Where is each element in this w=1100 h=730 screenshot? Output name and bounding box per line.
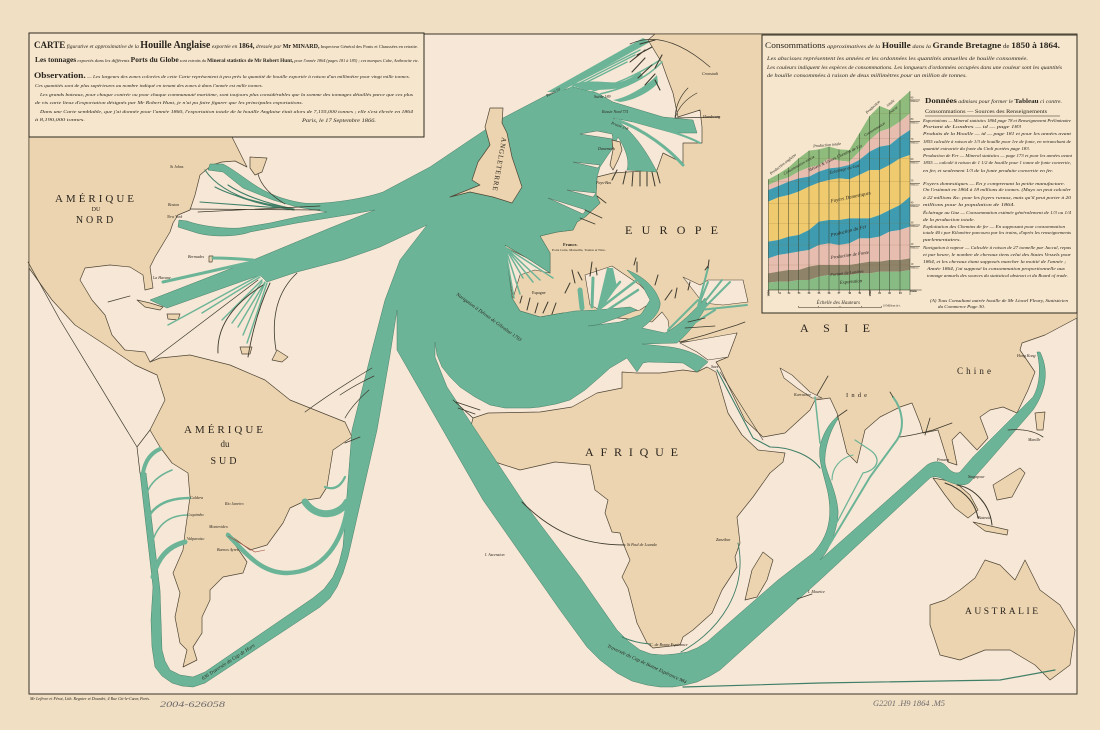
route: Cap de Bonne Espérance (622, 637, 650, 644)
annotation: Russie Nord: Russie Nord 731 (601, 109, 629, 114)
label: France (552, 242, 606, 253)
label: Afrique: AFRIQUE (585, 445, 678, 459)
area: total top green (768, 91, 910, 185)
year labels: 58 (848, 292, 852, 295)
year labels: 55 (818, 292, 821, 295)
chart panel frame (762, 35, 1077, 313)
source line: Les tonnages exportés dans les différents Ports du Globe sont extraits du Mineral statistics de Mr Robert Hunt, pour l'année 1864 (pages 181 à 185) ; ces marques Cube, Anthracite etc. (35, 56, 419, 64)
label: Chine: Chine (957, 366, 991, 376)
pale wedges in the North Sea (548, 131, 622, 214)
stream: Atlantic lines (200, 170, 294, 210)
area labels: Consommation exacte (782, 154, 816, 176)
stream: Prusse north (617, 120, 683, 165)
sources text: Portant de Londres — id — page 183 (922, 124, 1022, 129)
Spain port ticks (520, 262, 597, 314)
continent and country names (55, 137, 1038, 617)
axis values (910, 96, 919, 293)
route: Panama (108, 280, 258, 362)
route: Karachi (815, 397, 820, 443)
sources text: et par heure, le nombre de chevaux tiens celui des States Vessels pour (923, 252, 1071, 258)
scale: 10 Millions de t. (883, 305, 901, 308)
Prusse port ticks (612, 170, 660, 186)
right ticks (910, 100, 920, 267)
wedge: Le Havre (548, 198, 586, 214)
axis values: Millions (911, 225, 919, 228)
land: Australia (930, 560, 1075, 680)
route: Baltic lines (630, 39, 720, 118)
land: Antilles (167, 314, 180, 320)
branches along South America (28, 262, 360, 577)
axis values: 80 (911, 118, 914, 121)
label: Amérique du Sud: SUD (210, 456, 240, 467)
sources heading: Données admises pour former le Tableau ci contre. (925, 96, 1062, 105)
area: foyers domestiques yellow (768, 155, 910, 242)
scale (798, 300, 901, 308)
annotation: Méditerranée total: Navigation à Détroit de Gibraltar 1793 (454, 292, 522, 343)
year labels: 63 (899, 292, 902, 295)
year labels: 61 (878, 292, 882, 295)
port: St Paul de Loanda: St Paul de Loanda (627, 542, 657, 547)
sea: Persian Gulf (780, 368, 822, 398)
axis values: 30 (911, 221, 914, 224)
sources text: 1864, et les chevaux étant supposés marcher la moitié de l'année ; (923, 259, 1067, 265)
observation line 6: à 8,190,000 tonnes. (35, 117, 85, 123)
label: Inde: Inde (846, 392, 867, 399)
port: Caldera: Caldera (190, 495, 203, 500)
vertical grid (768, 91, 910, 295)
Spain fan (505, 247, 553, 298)
route: Newfoundland (258, 174, 285, 204)
route: Maurice (797, 594, 812, 599)
Holland and Belgium ticks (580, 196, 606, 224)
label: Australie: AUSTRALIE (965, 607, 1038, 617)
route: Mozambique (681, 543, 740, 652)
port: Côtes Holland: Pays-Bas (595, 180, 612, 185)
inner seas (505, 247, 822, 398)
branch: Coquimbo (152, 515, 188, 543)
sources text: Navigation à vapeur — Calculée à raison de 27 tonnelle par Jaccul, repas (922, 245, 1071, 251)
land: Madagascar (745, 552, 773, 600)
sources text: (A) Tous Consultant autrée houille de Mr Lionel Fleury, Statisticien (930, 298, 1069, 304)
label: France: Ports Cette, Marseille, Toulon et Nice. (552, 248, 606, 253)
footer: call number left: 2004-626058 (160, 700, 225, 709)
chart title: Consommations approximatives de la Houille dans la Grande Bretagne de 1850 à 1864. (765, 41, 1060, 50)
stream: Denmark (613, 75, 658, 102)
cartouche title line: CARTE figurative et approximative de la Houille Anglaise exportée en 1864, dressée par Mr MINARD, Inspecteur Général des Ponts et Chaussées en retraite. (34, 40, 418, 51)
port: Valparaiso: Valparaiso (187, 536, 204, 541)
land: Philippines (1035, 412, 1045, 430)
route: Red Sea double line (720, 372, 763, 440)
port: Ascension: I. Ascension (484, 552, 504, 557)
area labels: Production anglaise (768, 152, 797, 176)
sources text: 1855 calculée à raison de 1/3 de houille pour 1re de fonte, en retranchant de (923, 139, 1071, 145)
land: Java (973, 522, 1008, 535)
label: France: France. (563, 242, 578, 247)
stream: Catalonia (580, 290, 582, 308)
stream: Halifax (190, 206, 320, 212)
port: Coquimbo: Coquimbo (187, 512, 204, 517)
route: Australia (683, 670, 1055, 687)
sources text: de la production totale. (923, 217, 975, 222)
Norway port ticks (630, 40, 662, 90)
port: Boston: Boston (168, 202, 179, 207)
sources text: Éclairage au Gaz — Consommation estimée généralement de 1/3 ou 1/4 (922, 210, 1072, 215)
area labels: Production totale (812, 141, 841, 148)
sources subheading: Consommations — Sources des Renseignements (925, 109, 1047, 115)
route: Ceylon and Madras (833, 440, 877, 530)
land: Europe and Asia (505, 34, 1077, 465)
Med port ticks (634, 258, 709, 300)
port: Singapour: Singapour (968, 474, 985, 479)
branch: Rio de Janeiro (305, 502, 347, 514)
port: Penang: Penang (936, 457, 949, 462)
sources text: millions pour la population de 1864. (923, 202, 1015, 207)
streams to Spain and the Mediterranean (453, 247, 747, 418)
land: Guadeloupe (272, 350, 288, 362)
chart explanation: Les abscisses représentent les années et les ordonnées les quantités annuelles de houille consommée. (766, 57, 1028, 62)
branch: Paita (143, 449, 160, 473)
year labels: 1860 (868, 290, 872, 297)
footer: call number right: G2201 .H9 1864 .M5 (873, 699, 945, 708)
stream: Cuba side (163, 262, 252, 282)
sources text: Production de Fer — Mineral statistics — page 173 et pour les années avant (922, 153, 1073, 158)
branch: Rio de la Plata (228, 510, 347, 573)
area labels: Éclairage au Gaz (828, 163, 860, 175)
stream: Marseille (592, 278, 593, 307)
observation heading and text: Observation. — Les largeurs des zones colorées de cette Carte représentent à peu près la quantité de houille exportée à raison d'un millimètre pour vingt mille tonnes. (34, 71, 410, 80)
wedge: Belgium (573, 162, 600, 168)
area labels: exacte (888, 104, 899, 115)
stacked area chart (767, 91, 922, 308)
area labels: Consommation (863, 120, 886, 138)
panel: British consumption chart (762, 35, 1077, 313)
annotation: Suède: Suède 189 (594, 94, 611, 99)
land: Borneo (993, 468, 1025, 500)
year labels: 53 (798, 292, 801, 295)
area labels: Foyers Domestiques (829, 191, 871, 205)
sources text: totale 40 t par Kilomètre parcouru par les trains, d'après les renseignements (923, 230, 1071, 236)
port: Buenos Ayres: Buenos Ayres (217, 547, 239, 552)
panel: title cartouche (29, 33, 424, 137)
area labels (768, 98, 899, 286)
stream: Hamburg side (633, 121, 700, 143)
port: Suez: Suez (711, 364, 719, 369)
branch: Valparaiso (153, 542, 185, 577)
label: Amérique du Sud (184, 424, 266, 467)
route: Bombay Persia (832, 455, 853, 480)
branch: Bahia (325, 477, 345, 488)
axis values: Millions (911, 122, 919, 125)
route: Aden and Suez (717, 370, 820, 468)
label: Amérique du Sud: du (220, 439, 230, 449)
label: Amérique du Nord (55, 193, 137, 226)
stream annotations and port names (152, 71, 1041, 686)
streams to the Baltic and North Sea (547, 38, 720, 224)
label: Asie: ASIE (800, 321, 870, 335)
axis values: Millions (911, 142, 919, 145)
annotation: Prusse: Prusse 318 (610, 120, 629, 131)
land: Newfoundland (250, 157, 267, 175)
area: exportation green (768, 270, 910, 290)
cartouche frame (29, 33, 424, 137)
route: Barbados (274, 273, 297, 350)
area: fonte pink (768, 227, 910, 273)
land: Trinidad (240, 347, 252, 354)
Caribbean fan (168, 275, 267, 343)
area labels: Production (864, 99, 881, 115)
main green coal stream (140, 87, 1045, 687)
sources text: parlementaires. (922, 237, 961, 242)
port: Hambourg: Hambourg (702, 114, 720, 119)
axis values: 70 (911, 138, 914, 141)
port: Bermudes: Bermudes (188, 254, 204, 259)
port: Rio: Rio Janeiro (224, 501, 244, 506)
year labels (767, 290, 902, 297)
route: Pacific coast north (28, 262, 150, 473)
area labels: Production de Fonte (830, 251, 869, 261)
wedge: Holland (580, 131, 613, 139)
port: La Havane: La Havane (152, 275, 171, 280)
year labels: 54 (808, 292, 811, 295)
sea: Black Sea (683, 277, 748, 305)
sources text (922, 118, 1073, 309)
port: Copenhague: Danemark (597, 146, 615, 151)
observation line 2: Ces quantités sont de plus supérieures au nombre indiqué en tenant des zones à dans l'année est mille tonnes. (35, 83, 263, 88)
stream: Norway fine lines (565, 50, 662, 94)
year labels: 52 (788, 292, 791, 295)
label: Angleterre: ANGLETERRE (491, 137, 508, 191)
observation line 5: Dans une Carte semblable, que j'ai donnée pour l'année 1860, l'exportation totale de la houille Anglaise était alors de 7,155,000 tonnes ; elle s'est élevée en 1864 (39, 109, 414, 115)
land: Africa (470, 367, 785, 648)
axis values: Millions (911, 267, 919, 270)
stream: Black Sea fan (695, 268, 747, 318)
Sierra Leone fan (453, 400, 480, 418)
branch: Callao (147, 470, 172, 493)
footer: engraver credit: Mr Lefèvre et Fêrat, Lith. Regnier et Dourdet, 4 Rue Git-le-Cœur, Paris. (29, 697, 150, 702)
sea: Biscay wedge (505, 247, 550, 298)
route: St Paul de Loanda (522, 502, 625, 545)
sources text: à 22 millions &c. pour les foyers ruraux, mais qu'il peut porter à 20 (923, 195, 1072, 201)
Turkey route lines (680, 318, 745, 342)
year labels: 59 (858, 292, 862, 295)
date line: Paris, le 17 Septembre 1866. (301, 119, 376, 124)
route: Calcutta (828, 397, 902, 547)
axis values: 60 (911, 158, 914, 161)
area labels: Exportation (839, 279, 863, 286)
route: Bay of Bengal (900, 418, 952, 437)
area labels: totale (885, 98, 896, 107)
area labels: Métiers & Usines Chemins de Fer (806, 143, 863, 173)
axis values: 50 (911, 180, 914, 183)
land: Angleterre (450, 108, 522, 203)
land: Bermuda (209, 256, 213, 262)
route: Montevideo red line (228, 536, 265, 552)
chart explanation (766, 57, 1062, 79)
port: Zanzibar: Zanzibar (716, 537, 731, 542)
branches in the Indian Ocean (522, 370, 1055, 687)
area: chemins de fer pink (768, 113, 910, 190)
sources text: 1855 — calculé à raison de 1 1/2 de houille pour 1 tonne de fonte convertie, (923, 160, 1071, 166)
sources text: Exportations — Mineral statistics 1864 page 78 et Renseignement Préliminaire (922, 118, 1071, 123)
route: Pernambuco (345, 437, 360, 443)
axis values: 90 (911, 96, 914, 99)
stream: Sweden (570, 72, 643, 90)
sources text: Produits de la Houille — id — page 181 et pour les années avant (922, 131, 1072, 136)
year labels: 51 (778, 292, 782, 295)
label: Amérique du Nord: DU (92, 207, 101, 213)
year labels: 62 (888, 292, 892, 295)
axis values: Millions (911, 162, 919, 165)
sources text: Foyers domestiques — En y comprenant la petite manufacture. (922, 181, 1065, 186)
sea: Ionian (640, 312, 670, 340)
area: gaz blue (768, 130, 910, 202)
port: New York: New York (166, 214, 183, 219)
route: Demerara (218, 283, 270, 357)
chart explanation: Les couleurs indiquent les espèces de consommations. Les longueurs d'ordonnées occupées dans une couleur sont les quantités (766, 66, 1062, 71)
streams to North America and the Caribbean (108, 170, 374, 418)
port: Maurice: I. Maurice (807, 589, 825, 594)
port: Hong Kong: Hong Kong (1016, 353, 1036, 358)
baseline (768, 289, 922, 291)
label: Amérique du Nord: AMÉRIQUE (55, 193, 137, 205)
land: Cuba (137, 300, 163, 310)
label: Espagne: Espagne (532, 290, 546, 295)
port: Aden: Kurrachee (793, 392, 811, 397)
axis values: Dans (910, 289, 918, 293)
observation line 3: Les grands bateaux, pour chaque contrée ou pour chaque communauté maritime, sont toujours plus considérables que la somme des tonnages détaillés parce que ces plus (39, 92, 413, 98)
wedge: Jutland land (610, 140, 622, 170)
port: Manille: Manille (1027, 437, 1041, 442)
annotation: Cape Horn: 636 Traversée du Cap de Horn (201, 643, 257, 682)
label: Amérique du Sud: AMÉRIQUE (184, 424, 266, 436)
route: Singapore to Java (945, 483, 992, 525)
label: Amérique du Nord: NORD (76, 215, 116, 226)
chart explanation: de houille consommées à raison de deux millimètres pour un million de tonnes. (767, 74, 967, 79)
sources text: quantité extractée du fonte du Cinli portées page 183. (923, 146, 1030, 151)
axis values: Millions (911, 183, 919, 186)
sources text: en fer, et seulement 1/3 de la fonte produite convertie en fer. (923, 168, 1053, 174)
axis values: 10 (911, 263, 914, 266)
sea: western Mediterranean (585, 266, 655, 315)
streams: Italy west (598, 280, 638, 313)
sea: Levant (680, 333, 737, 360)
area labels: Production du Fer (829, 225, 867, 239)
branch: Caldera (148, 498, 190, 518)
port: Cronstadt: Cronstadt (702, 71, 719, 76)
year labels: 1850 (767, 290, 771, 297)
stream bundle: Norway (547, 38, 650, 92)
horizontal grid (768, 113, 910, 265)
axis values: Millions (911, 205, 919, 208)
sources text: On l'estimait en 1864 à 18 millions de tonnes. (Mayo on peut calculer (923, 187, 1071, 192)
wedge: Dunkerque (567, 190, 596, 197)
year labels: 56 (828, 292, 831, 295)
port: St Johns: St Johns (170, 164, 184, 169)
sources text: Exploitation des Chemins de fer — En supposant pour consommation (922, 224, 1066, 229)
area: production du fer blue (768, 197, 910, 258)
observation line 4: de vis carte lieux d'exportation désignés par Mr Robert Hunt, je n'ai pu faire figurer que les principales exportations. (35, 100, 303, 106)
stream: Aegean band (668, 300, 715, 335)
port: Cap de Bonne Espérance: C. de Bonne Espérance (650, 642, 688, 647)
land: Sumatra (933, 478, 978, 518)
year labels: 57 (838, 292, 841, 295)
sources subheading (925, 109, 1060, 116)
axis values: Millions (911, 100, 919, 103)
sources text: du Commerce Page 30. (938, 304, 985, 309)
port: Montevideo: Montevideo (208, 524, 228, 529)
axis values: Millions (911, 247, 919, 250)
annotation: Norway stream: Russie 93 (544, 86, 561, 98)
land: the Americas (29, 137, 352, 667)
stream: Bermuda (213, 258, 253, 260)
route: Guiana thin lines (305, 368, 374, 418)
ticks on India (817, 376, 893, 417)
sources text: Année 1864, j'ai supposé la consommation proportionnelle aux (926, 266, 1065, 272)
axis values: 20 (911, 243, 914, 246)
axis values: 40 (911, 201, 914, 204)
annotation: Cape route: Traversée du Cap de Bonne Espérance 984 (606, 644, 687, 686)
port: Batavia: Batavia (978, 515, 990, 520)
route: Manila (1008, 430, 1043, 437)
scale: Échelle des Hauteurs (816, 300, 860, 306)
area: Londres taupe (768, 258, 910, 283)
label: Europe: EUROPE (625, 223, 718, 237)
sources text: tonnage annuels des sources du statistical abstract et du Board of trade. (927, 273, 1068, 278)
stream: Genoa wide (597, 268, 617, 315)
area labels: Portant de Londres (829, 268, 864, 277)
